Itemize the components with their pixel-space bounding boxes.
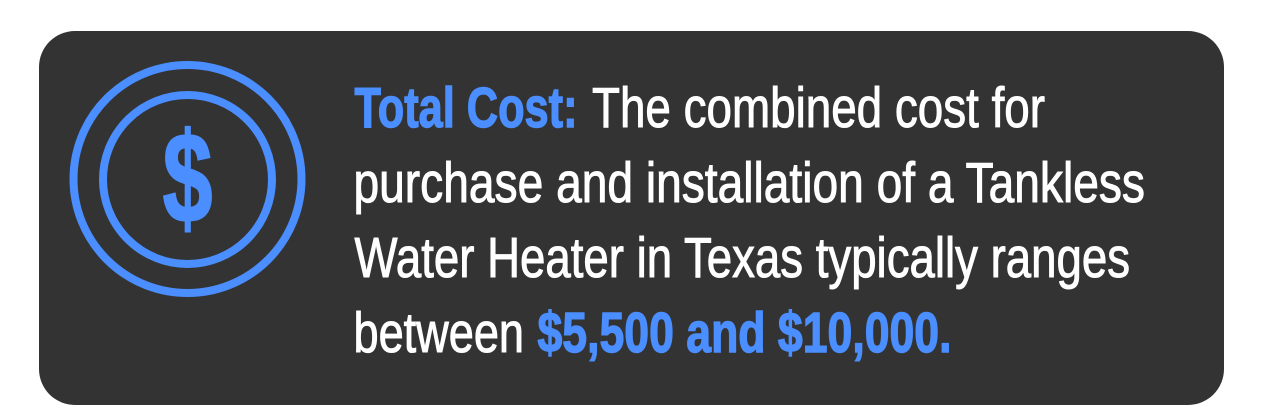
icon: dollar sign: $ [163, 107, 212, 250]
icon: coin outer ring [74, 65, 302, 293]
icon: dollar coin [74, 65, 302, 293]
text line 4 highlighted price range: $5,500 and $10,000. [538, 301, 952, 365]
text line 1: The combined cost for [592, 76, 1045, 140]
icon: coin inner ring [103, 95, 272, 264]
text line 4: between [354, 301, 524, 365]
text line 1 label: Total Cost: Total Cost: [354, 76, 578, 140]
text block: total cost description [354, 76, 1145, 365]
